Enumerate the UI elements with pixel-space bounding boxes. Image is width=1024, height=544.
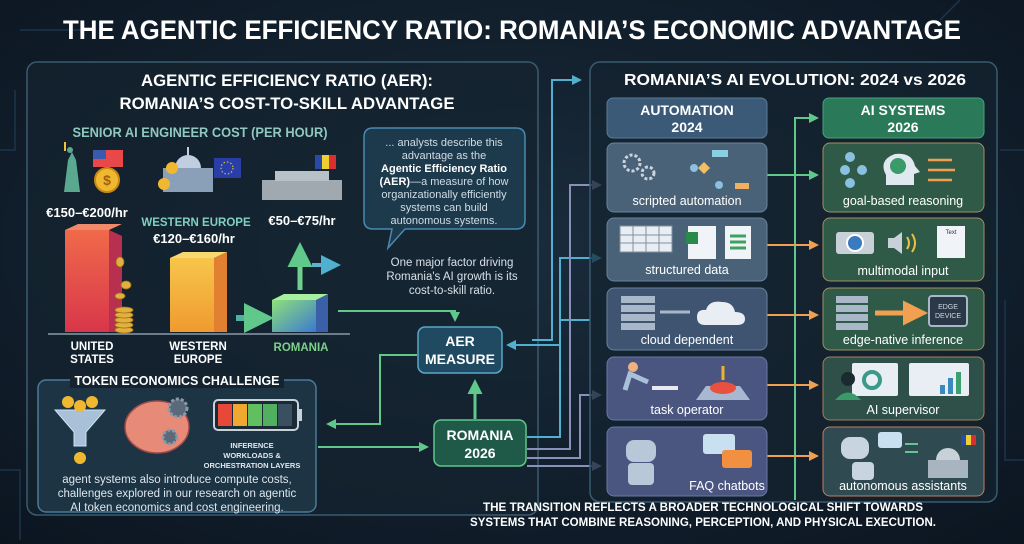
subheading: engineer cost: SENIOR AI ENGINEER COST (PER HOUR) — [72, 125, 328, 140]
panel: AER left — [27, 62, 538, 515]
text: token economics description: challenges explored in our research on agentic — [58, 488, 296, 500]
text: token economics description: AI token economics and cost engineering. — [70, 502, 284, 514]
header: automation 2024: 2024 — [671, 119, 703, 135]
header: automation 2024: AUTOMATION — [640, 102, 734, 118]
card: AI supervisor — [823, 357, 984, 420]
labels: regions: WESTERN — [169, 341, 227, 353]
heading: evolution: ROMANIA’S AI EVOLUTION: 2024 vs 2026 — [624, 72, 966, 89]
box: AER measure: MEASURE — [425, 351, 495, 367]
text: Western Europe price — [141, 217, 251, 246]
text: Western Europe price: WESTERN EUROPE — [141, 217, 251, 229]
footer: transition note: SYSTEMS THAT COMBINE REASONING, PERCEPTION, AND PHYSICAL EXECUTION. — [470, 515, 936, 529]
card: structured data: structured data — [645, 263, 729, 277]
card: AI supervisor: AI supervisor — [867, 403, 939, 417]
labels: regions — [70, 341, 328, 366]
text: major factor: One major factor driving — [391, 257, 513, 269]
box: AER measure — [418, 327, 502, 373]
card: multimodal input: Text — [945, 230, 957, 236]
callout: AER definition — [364, 128, 525, 248]
box: Romania 2026: 2026 — [464, 445, 496, 461]
labels: regions: STATES — [70, 354, 114, 366]
text: token economics description — [58, 474, 296, 514]
card: multimodal input — [823, 218, 984, 281]
card: edge-native inference: EDGE — [938, 304, 958, 311]
icon: EU building — [158, 147, 241, 192]
text: inference workloads: ORCHESTRATION LAYERS — [204, 461, 300, 470]
callout: AER definition: Agentic Efficiency Ratio — [381, 163, 507, 175]
card: task operator — [607, 357, 767, 420]
card: edge-native inference: edge-native inference — [843, 333, 963, 347]
box: AER measure: AER — [445, 333, 475, 349]
card: autonomous assistants: autonomous assistants — [839, 479, 967, 493]
heading: AER: AGENTIC EFFICIENCY RATIO (AER): — [141, 71, 433, 90]
text: inference workloads: INFERENCE — [230, 441, 274, 450]
card: edge-native inference — [823, 288, 984, 350]
card: cloud dependent — [607, 288, 767, 350]
card: scripted automation — [607, 143, 767, 212]
text: major factor: Romania's AI growth is its — [386, 271, 518, 283]
callout: AER definition: (AER)—a measure of how — [380, 176, 509, 188]
panel: token economics — [38, 372, 316, 514]
header: automation 2024 — [607, 98, 767, 138]
text: major factor — [386, 257, 518, 297]
icon: Romania palace and flag — [262, 155, 342, 200]
labels: regions: UNITED — [71, 341, 113, 353]
text: inference workloads — [204, 441, 300, 470]
footer: transition note — [470, 500, 936, 529]
card: scripted automation: scripted automation — [632, 194, 742, 208]
card: goal-based reasoning: goal-based reasoning — [843, 194, 963, 208]
title: THE AGENTIC EFFICIENCY RATIO: ROMANIA’S ECONOMIC ADVANTAGE — [63, 15, 961, 45]
callout: AER definition: advantage as the — [402, 150, 486, 162]
header: AI systems 2026: 2026 — [887, 119, 919, 135]
icon: US statue and flag: $ — [103, 172, 111, 188]
text: US price: €150–€200/hr — [46, 205, 128, 220]
arrows: evolution links — [767, 118, 815, 500]
heading: token economics: TOKEN ECONOMICS CHALLENGE — [74, 373, 280, 388]
card: task operator: task operator — [651, 403, 723, 417]
icon: battery gauge — [214, 400, 302, 430]
heading: AER — [120, 71, 454, 113]
card: FAQ chatbots: FAQ chatbots — [689, 479, 765, 493]
text: Western Europe price: €120–€160/hr — [153, 231, 235, 246]
card: edge-native inference: DEVICE — [935, 313, 961, 320]
arrows: connectors — [318, 80, 598, 466]
box: Romania 2026: ROMANIA — [447, 427, 513, 443]
icon: brain with gears — [125, 399, 189, 453]
card: cloud dependent: cloud dependent — [641, 333, 734, 347]
text: inference workloads: WORKLOADS & — [223, 451, 281, 460]
bar chart: cost by region — [48, 224, 350, 334]
card: FAQ chatbots — [607, 427, 767, 496]
footer: transition note: THE TRANSITION REFLECTS A BROADER TECHNOLOGICAL SHIFT TOWARDS — [483, 500, 923, 514]
callout: AER definition: organizationally efficiently — [381, 189, 507, 201]
panel: AI evolution — [590, 62, 997, 502]
labels: regions: ROMANIA — [274, 342, 328, 354]
text: major factor: cost-to-skill ratio. — [409, 285, 495, 297]
header: AI systems 2026: AI SYSTEMS — [861, 102, 945, 118]
heading: AER: ROMANIA’S COST-TO-SKILL ADVANTAGE — [120, 94, 454, 113]
icon: US statue and flag — [64, 142, 123, 192]
callout: AER definition: systems can build — [400, 202, 488, 214]
text: token economics description: agent systems also introduce compute costs, — [62, 474, 292, 486]
callout: AER definition: ... analysts describe this — [385, 137, 503, 149]
card: autonomous assistants — [823, 427, 984, 496]
card: goal-based reasoning — [823, 143, 984, 212]
card: structured data — [607, 218, 767, 281]
labels: regions: EUROPE — [174, 354, 223, 366]
callout: AER definition: autonomous systems. — [390, 215, 498, 227]
box: Romania 2026 — [434, 420, 526, 466]
header: AI systems 2026 — [823, 98, 984, 138]
card: multimodal input: multimodal input — [857, 264, 949, 278]
icon: funnel with coins — [55, 396, 105, 464]
text: Romania price: €50–€75/hr — [268, 213, 336, 228]
